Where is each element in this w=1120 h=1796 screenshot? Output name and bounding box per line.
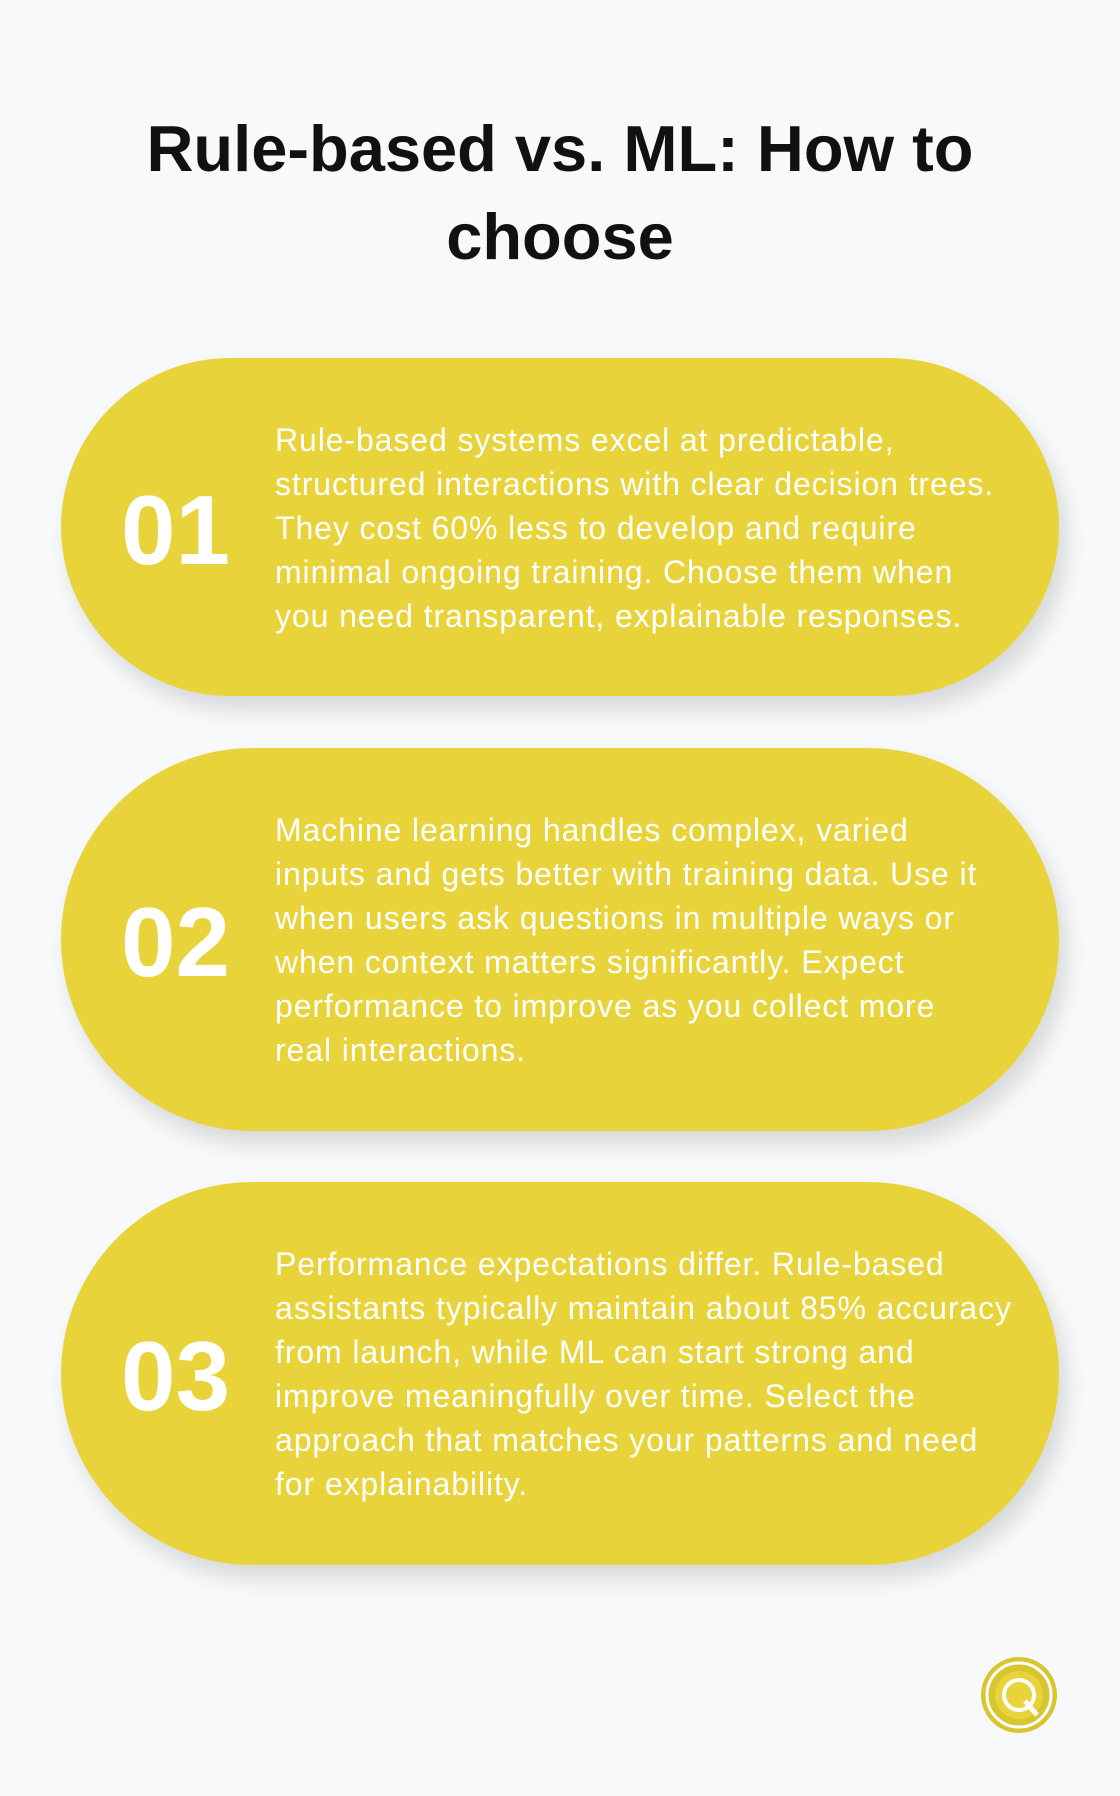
- text block 01: [275, 422, 994, 634]
- text block 01: minimal ongoing training. Choose them when: [275, 554, 953, 590]
- panel: 03: [61, 1182, 1059, 1565]
- text block 02: inputs and gets better with training data. Use it: [275, 856, 977, 892]
- title: [146, 112, 974, 273]
- number 02: 02: [121, 887, 230, 997]
- title: Rule-based vs. ML: How to: [146, 112, 974, 185]
- number 03: 03: [121, 1321, 230, 1431]
- text block 02: [275, 812, 977, 1068]
- text block 01: They cost 60% less to develop and require: [275, 510, 917, 546]
- text block 03: approach that matches your patterns and need: [275, 1422, 978, 1458]
- text block 02: Machine learning handles complex, varied: [275, 812, 909, 848]
- panel: 02: [61, 748, 1059, 1131]
- text block 03: [275, 1246, 1012, 1502]
- title: choose: [446, 200, 674, 273]
- text block 02: performance to improve as you collect more: [275, 988, 935, 1024]
- text block 03: improve meaningfully over time. Select the: [275, 1378, 916, 1414]
- number 01: 01: [121, 475, 230, 585]
- panel: 01: [61, 358, 1059, 696]
- text block 01: Rule-based systems excel at predictable,: [275, 422, 894, 458]
- text block 02: when users ask questions in multiple ways or: [275, 900, 955, 936]
- text block 02: when context matters significantly. Expect: [275, 944, 904, 980]
- text block 01: structured interactions with clear decision trees.: [275, 466, 994, 502]
- text block 02: real interactions.: [275, 1032, 526, 1068]
- text block 01: you need transparent, explainable responses.: [275, 598, 962, 634]
- text block 03: assistants typically maintain about 85% accuracy: [275, 1290, 1012, 1326]
- text block 03: for explainability.: [275, 1466, 528, 1502]
- text block 03: Performance expectations differ. Rule-based: [275, 1246, 945, 1282]
- icon: logo: [981, 1657, 1057, 1733]
- text block 03: from launch, while ML can start strong and: [275, 1334, 915, 1370]
